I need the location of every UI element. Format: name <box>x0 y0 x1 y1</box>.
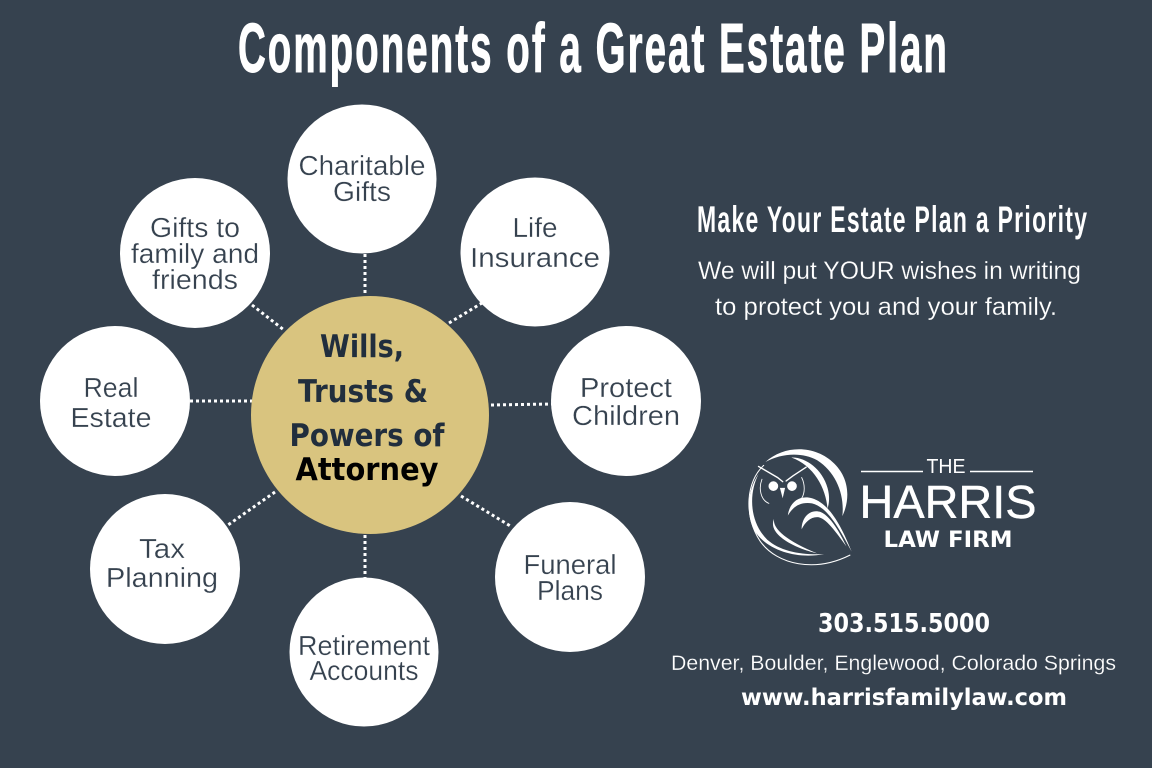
body text: We will put YOUR wishes in writing <box>698 257 1081 285</box>
satellite: Retirement Accounts: Retirement <box>298 630 430 661</box>
central circle: Wills, Trusts & Powers of Attorney: Trusts & <box>298 374 428 410</box>
satellite: Protect Children: Protect <box>580 372 672 403</box>
logo: The Harris Law Firm: LAW FIRM <box>884 528 1012 553</box>
satellite: Tax Planning: Tax <box>139 533 185 564</box>
satellite: Retirement Accounts: Accounts <box>310 655 418 686</box>
satellite: Charitable Gifts <box>288 104 436 254</box>
satellite: Funeral Plans: Plans <box>537 575 603 606</box>
central circle: Wills, Trusts & Powers of Attorney <box>251 296 489 534</box>
satellite: Life Insurance: Insurance <box>470 242 600 273</box>
satellite: Tax Planning: Planning <box>106 562 218 593</box>
satellite: Life Insurance <box>460 178 610 326</box>
phone: 303.515.5000 <box>818 609 990 639</box>
satellite: Gifts to family and friends: friends <box>152 264 238 295</box>
central circle: Wills, Trusts & Powers of Attorney: Powers of <box>290 418 445 454</box>
icon: owl <box>749 449 852 565</box>
dotted connectors <box>190 254 552 579</box>
body text <box>698 257 1081 321</box>
satellite: Real Estate <box>40 326 190 476</box>
satellite: Funeral Plans: Funeral <box>524 549 616 580</box>
central circle: Wills, Trusts & Powers of Attorney: Wills, <box>320 329 404 365</box>
logo: The Harris Law Firm: HARRIS <box>860 476 1036 528</box>
locations: Denver, Boulder, Englewood, Colorado Springs <box>671 652 1116 675</box>
satellite: Real Estate: Real <box>84 372 138 403</box>
logo: The Harris Law Firm: THE <box>926 456 966 478</box>
satellite: Charitable Gifts: Gifts <box>333 176 391 207</box>
subheading: Make Your Estate Plan a Priority <box>697 198 1087 240</box>
satellite: Tax Planning <box>90 494 240 644</box>
website: www.harrisfamilylaw.com <box>741 685 1067 711</box>
satellite: Funeral Plans <box>495 502 645 652</box>
body text: to protect you and your family. <box>715 293 1057 321</box>
satellite: Protect Children <box>551 326 701 476</box>
title: Components of a Great Estate Plan <box>238 9 947 87</box>
satellite: Gifts to family and friends: family and <box>131 238 259 269</box>
logo: The Harris Law Firm <box>749 449 1036 565</box>
satellite: Charitable Gifts: Charitable <box>298 150 426 181</box>
satellite: Gifts to family and friends <box>120 178 270 328</box>
satellite: Protect Children: Children <box>572 400 680 431</box>
satellite: Life Insurance: Life <box>512 212 558 243</box>
central circle: Wills, Trusts & Powers of Attorney: Attorney <box>296 452 438 488</box>
satellite: Gifts to family and friends: Gifts to <box>150 212 240 243</box>
satellite: Retirement Accounts <box>290 578 438 726</box>
satellite: Real Estate: Estate <box>70 402 152 433</box>
